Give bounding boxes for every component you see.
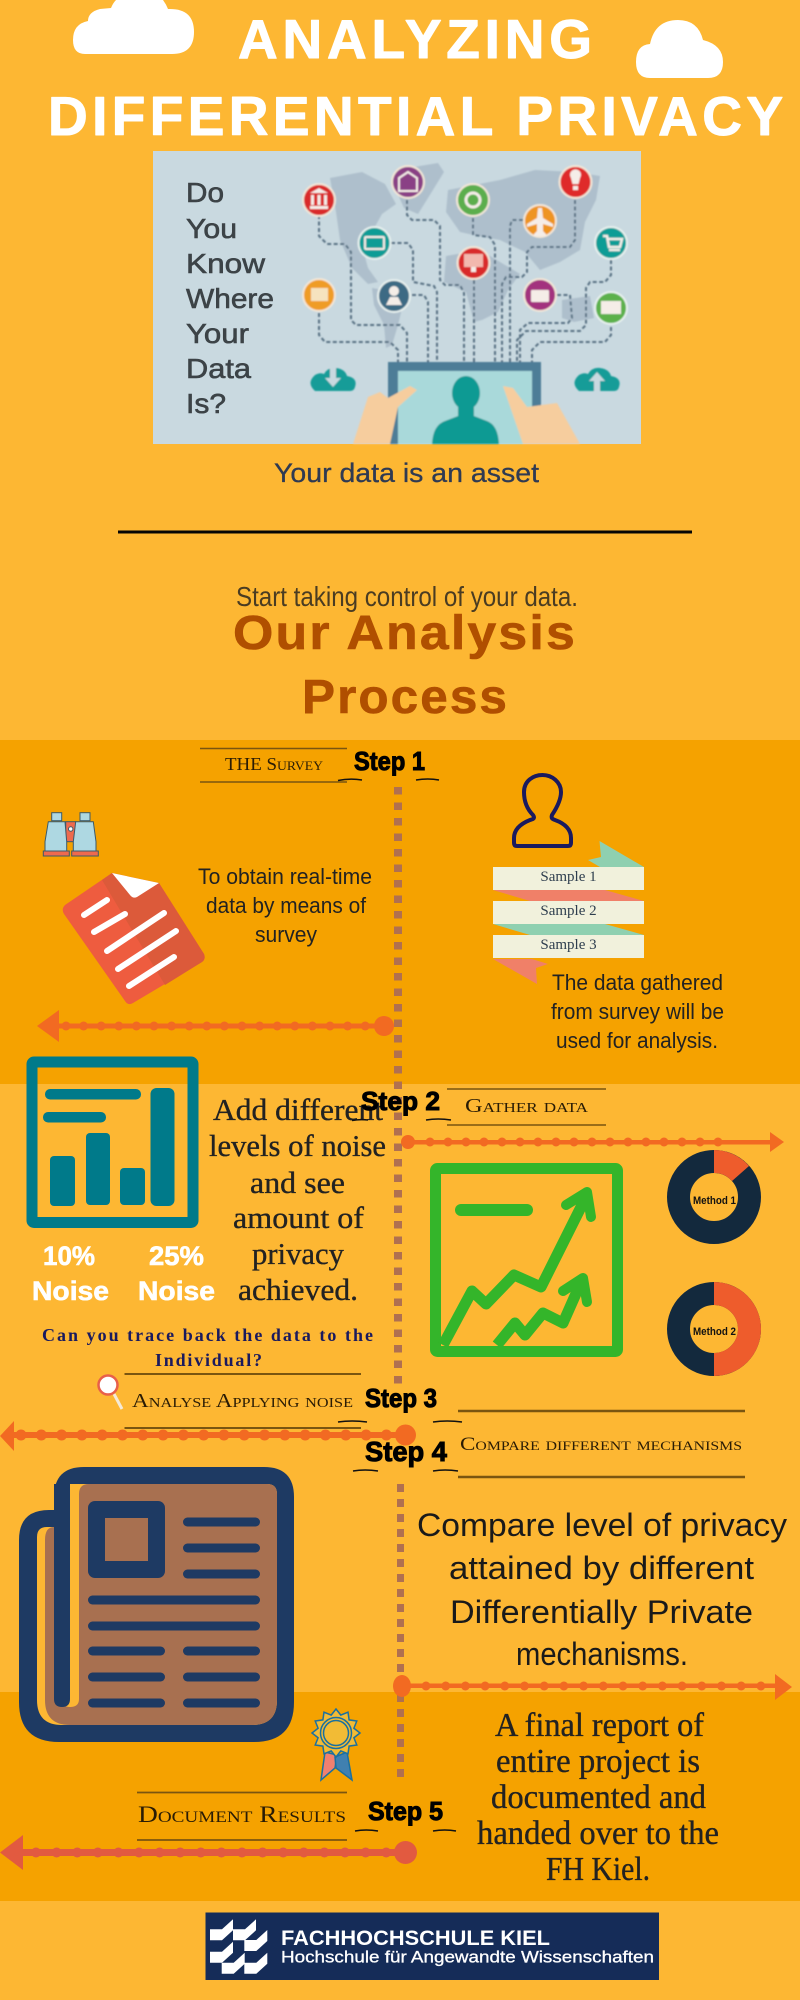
heading: our analysis process: Process [302,671,509,724]
title: DIFFERENTIAL PRIVACY [48,85,783,147]
step 4 label: Step 4 [365,1436,447,1467]
text: trace back question: Individual? [155,1350,262,1370]
text: noise levels: 10% [43,1241,95,1271]
text: final report: entire project is [496,1743,700,1780]
step 3 label [124,1374,745,1428]
icon: bar chart [32,1062,193,1222]
icon: person [514,775,571,846]
step 4 label [353,1434,745,1477]
title [48,8,783,147]
text: compare privacy: mechanisms. [516,1636,688,1672]
illustration text: Do [186,177,224,208]
text: survey goal [198,864,372,947]
icon: survey document [63,873,205,1004]
text: final report [477,1707,719,1888]
text: final report: documented and [491,1779,706,1816]
icon: newspaper [19,1467,294,1742]
logo: fachhochschule kiel: Hochschule für Angewandte Wissenschaften [281,1948,654,1966]
arrow: step 2 [401,1132,784,1152]
illustration text: You [186,213,237,244]
text: trace back question [42,1325,373,1370]
text: noise levels: 25% [149,1241,204,1271]
app icons [303,166,627,324]
step 1 label: Step 1 [354,746,425,776]
step 4 label: Compare different mechanisms [460,1434,742,1455]
text: data gathered [551,970,724,1053]
step 5 label [137,1792,456,1840]
arrow: step 5 [0,1835,417,1870]
illustration text: Your [186,318,249,349]
icon: growth chart [436,1168,618,1352]
icon glyphs [310,169,622,314]
illustration text: Data [186,353,251,384]
step 2 label: Step 2 [361,1086,440,1116]
text: trace back question: Can you trace back the data to the [42,1325,373,1345]
step 1 label [200,746,439,782]
logo: fachhochschule kiel [206,1912,659,1980]
donut chart: method 1 [678,1150,750,1232]
logo: fachhochschule kiel: FACHHOCHSCHULE KIEL [281,1927,550,1950]
text: survey goal: data by means of [206,893,367,918]
ribbon: samples [493,841,644,984]
heading: our analysis process [233,607,577,724]
text: compare privacy: attained by different [449,1550,754,1586]
text: add noise description: Add different [213,1092,383,1127]
icon: magnifier [98,1376,122,1409]
text: data gathered: The data gathered [552,970,723,995]
text: data gathered: used for analysis. [556,1028,718,1053]
text: final report: A final report of [495,1707,705,1744]
text: noise levels [32,1241,215,1306]
step 5 label: Step 5 [368,1796,443,1826]
icon: left cloud [73,0,194,54]
text: add noise description: levels of noise [209,1128,386,1163]
step 1 label: THE Survey [225,754,324,774]
text: final report: FH Kiel. [546,1851,650,1888]
text: add noise description: and see [250,1165,345,1200]
illustration: do you know where your data is [153,151,641,444]
text: add noise description: amount of [233,1200,365,1235]
illustration text: Where [186,283,274,314]
step 2 label [352,1086,606,1125]
donut chart: method 1: Method 1 [693,1195,736,1207]
icon: right cloud [636,20,723,78]
timeline spine upper [394,787,402,1387]
icon: binoculars [43,813,98,856]
illustration text: Know [186,248,266,279]
person on tablet [432,376,499,444]
logo mark [210,1919,267,1974]
donut chart: method 2 [678,1282,761,1376]
text: noise levels: Noise [32,1276,109,1306]
text: survey goal: survey [255,922,317,947]
arrow: step 3 [0,1421,416,1451]
illustration text: Is? [186,388,226,419]
download and upload clouds [310,368,620,391]
arrow: step 4 [393,1674,792,1700]
text: compare privacy: Differentially Private [450,1594,753,1630]
ribbon: samples: Sample 2 [540,903,597,919]
text: final report: handed over to the [477,1815,719,1852]
text: data gathered: from survey will be [551,999,724,1024]
illustration text [186,177,274,419]
step 2 label: Gather data [465,1095,589,1117]
text: survey goal: To obtain real-time [198,864,372,889]
tablet [388,362,541,444]
text: add noise description: achieved. [238,1272,358,1307]
text: add noise description: privacy [252,1236,344,1271]
title: ANALYZING [238,8,592,70]
arrow: step 1 [37,1010,394,1042]
text: add noise description [209,1092,386,1307]
step 3 label: Analyse Applying noise [132,1390,353,1412]
ribbon: samples: Sample 1 [540,869,597,885]
step 5 label: Document Results [138,1802,346,1827]
tagline: Your data is an asset [274,458,540,488]
data connection lines [319,200,611,362]
ribbon: samples: Sample 3 [540,937,597,953]
text: compare privacy [417,1507,787,1672]
text: compare privacy: Compare level of privacy [417,1507,787,1543]
timeline spine lower [397,1484,404,1778]
world map [330,163,600,348]
icon: medal [312,1709,360,1780]
hands [353,386,417,444]
step 3 label: Step 3 [365,1383,437,1413]
donut chart: method 2: Method 2 [693,1326,736,1338]
text: noise levels: Noise [138,1276,215,1306]
subheading: Start taking control of your data. [236,581,578,612]
heading: our analysis process: Our Analysis [233,607,577,660]
